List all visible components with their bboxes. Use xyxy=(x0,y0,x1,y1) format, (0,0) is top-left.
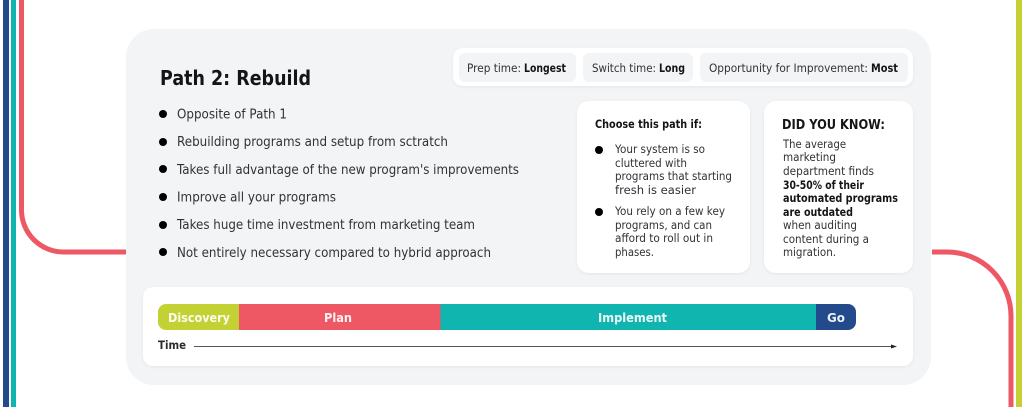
phase: discovery: Discovery xyxy=(168,310,230,325)
phase: go xyxy=(816,304,856,330)
card: did you know: DID YOU KNOW: xyxy=(782,118,885,133)
lime vertical line xyxy=(1016,0,1022,407)
time arrow xyxy=(194,344,897,348)
card: choose this path if: Your system is so xyxy=(614,142,705,156)
bullet list: Takes huge time investment from marketing team xyxy=(176,218,475,233)
card: choose this path if: cluttered with xyxy=(615,156,687,170)
timeline card xyxy=(143,287,913,366)
card: did you know: content during a xyxy=(783,232,869,246)
card: did you know: marketing xyxy=(783,150,836,164)
phase: plan xyxy=(239,304,440,330)
teal vertical line xyxy=(11,0,16,407)
bullet list: Opposite of Path 1 xyxy=(177,108,287,122)
card: choose this path if xyxy=(577,101,750,273)
stat: prep time: Prep time: xyxy=(467,61,521,75)
stat: switch time xyxy=(583,53,693,82)
red connector right xyxy=(932,252,1011,407)
card: did you know: department finds xyxy=(783,164,874,178)
stat: prep time xyxy=(459,53,576,82)
card: did you know xyxy=(764,101,913,273)
card: did you know: 30-50% of their xyxy=(783,178,864,192)
bullet list: Takes full advantage of the new program's improvements xyxy=(176,163,519,178)
phase: plan: Plan xyxy=(324,310,352,325)
title: Path 2: Rebuild xyxy=(160,66,311,90)
card: choose this path if: Choose this path if: xyxy=(595,117,702,131)
stat: opportunity for improvement xyxy=(700,53,908,82)
bullet list: Rebuilding programs and setup from sctratch xyxy=(177,135,448,150)
card: choose this path if: You rely on a few key xyxy=(614,204,725,218)
red connector left xyxy=(22,0,126,252)
stats bar xyxy=(453,48,913,86)
bullet list: Improve all your programs xyxy=(177,190,336,206)
card: did you know: The average xyxy=(782,137,846,151)
card: did you know: when auditing xyxy=(783,218,857,232)
stat: switch time: Switch time: xyxy=(592,61,656,75)
stat: opportunity for improvement: Opportunity for Improvement: xyxy=(709,61,868,75)
card: choose this path if: phases. xyxy=(615,245,654,259)
card: did you know: migration. xyxy=(783,245,836,259)
bullet list: Not entirely necessary compared to hybrid approach xyxy=(177,246,491,261)
stat: switch time: Long xyxy=(659,61,685,75)
main panel xyxy=(126,29,931,385)
phase: implement: Implement xyxy=(598,310,667,325)
phase: discovery xyxy=(158,304,239,330)
card: did you know: automated programs xyxy=(783,191,898,205)
bullet list xyxy=(159,108,519,261)
phase: implement xyxy=(440,304,816,330)
time label: Time xyxy=(158,338,186,352)
stat: prep time: Longest xyxy=(524,61,566,75)
card: choose this path if: fresh is easier xyxy=(615,183,696,197)
card: choose this path if: programs that starting xyxy=(615,169,732,183)
card: choose this path if: programs, and can xyxy=(615,218,712,232)
phase: go: Go xyxy=(827,310,845,325)
card: did you know: are outdated xyxy=(783,205,853,219)
navy vertical line xyxy=(3,0,9,407)
card: choose this path if: afford to roll out in xyxy=(615,231,713,245)
stat: opportunity for improvement: Most xyxy=(871,61,898,75)
